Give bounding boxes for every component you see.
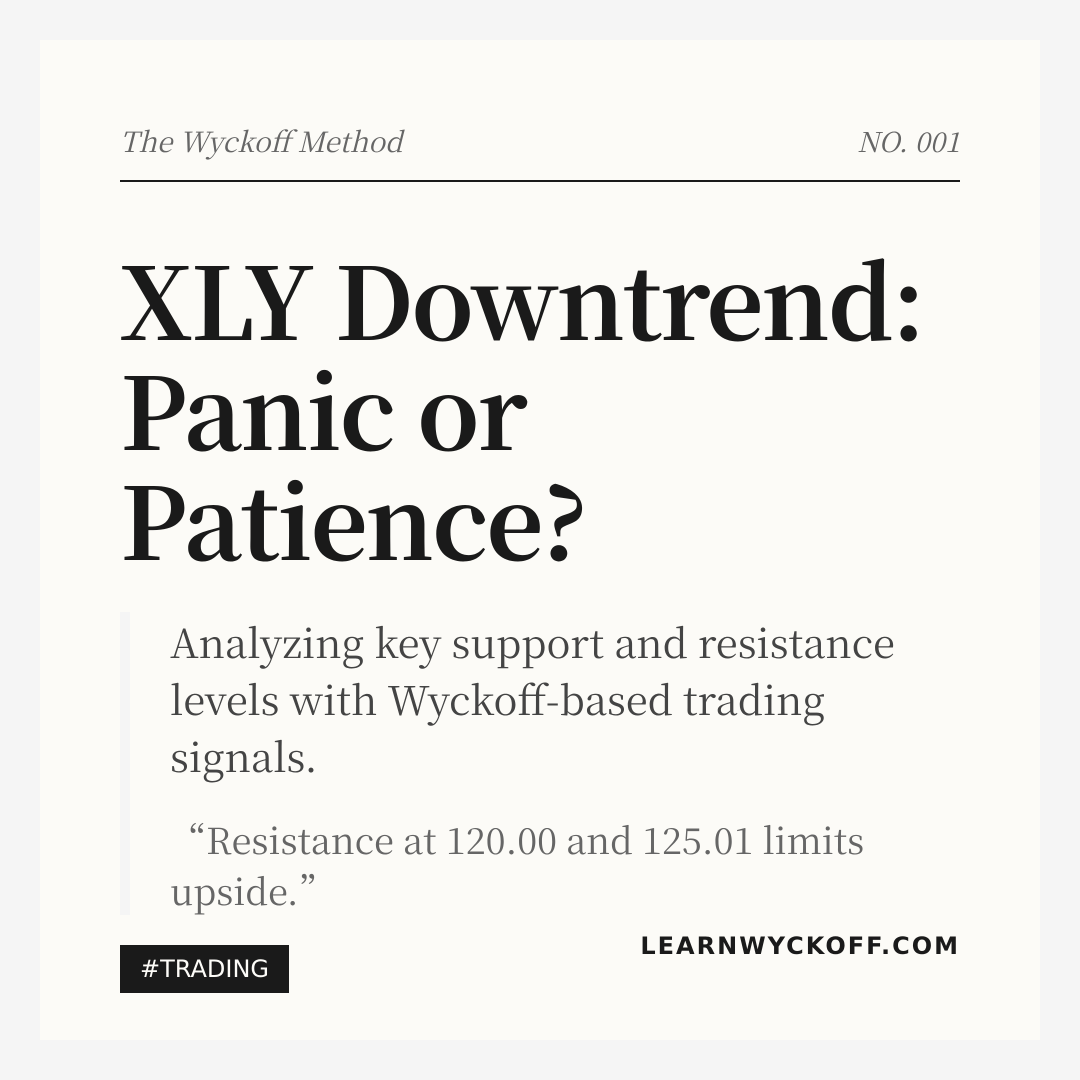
tag: #TRADING [140,955,269,983]
quote: upside.” [170,864,335,916]
subtitle [170,613,895,784]
heading: Patience? [120,445,586,589]
header rule [120,180,960,182]
quote: “Resistance at 120.00 and 125.01 limits [170,813,864,865]
subtitle: levels with Wyckoff-based trading [170,670,825,727]
heading [120,225,923,589]
subtitle: signals. [170,727,318,784]
heading: XLY Downtrend: [120,225,923,369]
website: LEARNWYCKOFF.COM [640,932,960,960]
issue number: NO. 001 [857,120,960,160]
quote [170,813,864,916]
tag [120,945,289,993]
heading: Panic or [120,335,526,479]
quote bar [120,612,130,915]
series title: The Wyckoff Method [120,120,402,160]
subtitle: Analyzing key support and resistance [170,613,895,670]
